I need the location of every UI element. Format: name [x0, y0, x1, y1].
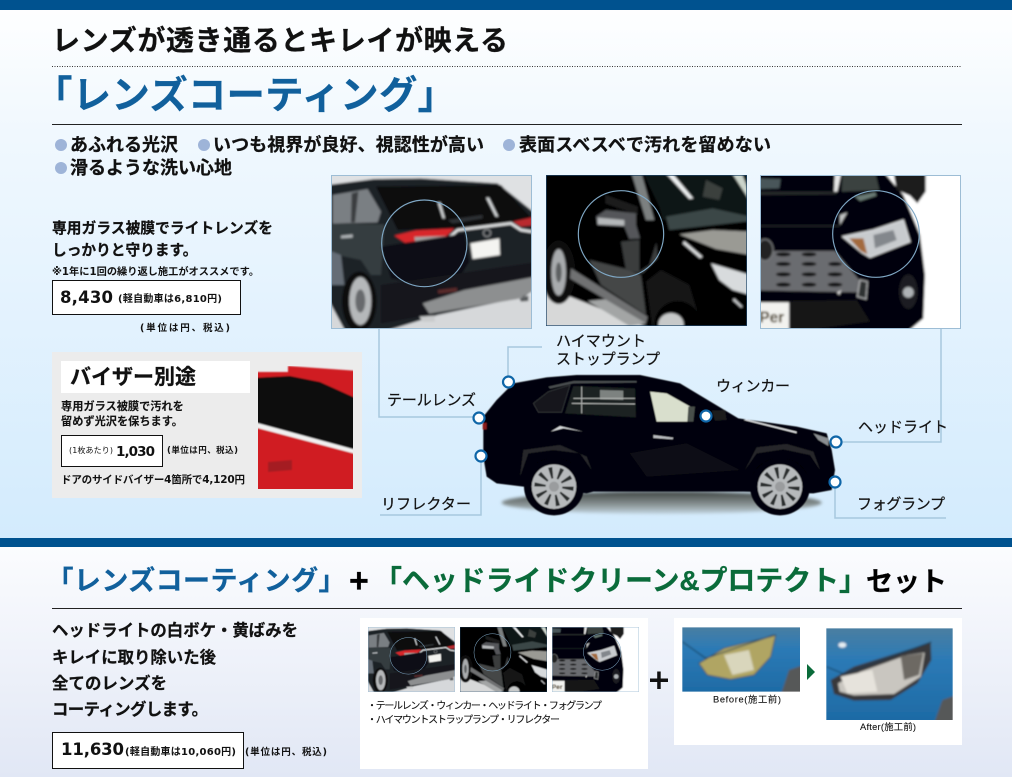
price box: set: 11,630: [61, 740, 124, 759]
hotspot markers: [474, 376, 842, 488]
price box: set: (軽自動車は10,060円): [125, 745, 236, 758]
lens list: [367, 699, 602, 726]
set description: コーティングします。: [52, 700, 208, 719]
car part labels: テールレンズ: [387, 392, 476, 409]
top blue bar: [0, 0, 1012, 10]
feature bullets: 表面スベスベで汚れを留めない: [519, 135, 771, 155]
lens list: ・テールレンズ・ウィンカー・ヘッドライト・フォグランプ: [367, 699, 602, 712]
car part labels: ハイマウント: [556, 333, 646, 350]
panel: visor: [52, 352, 362, 498]
set description: ヘッドライトの白ボケ・黄ばみを: [52, 622, 298, 640]
price box: set: [52, 732, 244, 768]
photo: winker: [542, 172, 750, 349]
feature bullets: いつも視界が良好、視認性が高い: [213, 134, 484, 155]
visor heading: バイザー別途: [70, 366, 196, 389]
visor heading: [61, 361, 250, 393]
before caption: Before(施工前): [713, 694, 781, 705]
car part labels: [381, 333, 948, 513]
visor text: 留めず光沢を保ちます。: [61, 414, 183, 428]
set description: キレイに取り除いた後: [52, 648, 217, 667]
description text: 専用ガラス被膜でライトレンズを: [52, 219, 273, 237]
description text: ※1年に1回の繰り返し施工がオススメです。: [52, 265, 259, 278]
description text: しっかりと守ります。: [52, 241, 197, 259]
unit note: (単位は円、税込): [140, 322, 230, 334]
visor note: ドアのサイドバイザー4箇所で4,120円: [61, 473, 245, 486]
photo: headlight: [757, 172, 964, 332]
visor text: 専用ガラス被膜で汚れを: [61, 399, 184, 413]
before photo: [682, 627, 800, 692]
thumbnails: [367, 626, 640, 702]
section divider bar: [0, 538, 1012, 547]
panel: lens thumbnails: [360, 618, 648, 769]
photo: tail lens: [328, 172, 535, 332]
set heading: 「レンズコーティング」: [46, 565, 346, 596]
after photo: [826, 628, 953, 720]
visor price box: [62, 436, 162, 466]
car part labels: ウィンカー: [716, 378, 790, 395]
car part labels: リフレクター: [381, 496, 471, 513]
visor price box: (1枚あたり): [69, 445, 113, 455]
car illustration: [483, 375, 835, 515]
set unit note: (単位は円、税込): [245, 746, 327, 758]
title: レンズが透き通るとキレイが映える: [52, 24, 508, 56]
feature bullets: 滑るような洗い心地: [70, 157, 232, 178]
set heading: [46, 562, 947, 600]
set heading: 「ヘッドライドクリーン&プロテクト」: [374, 565, 867, 596]
set heading: +: [349, 562, 369, 600]
plus sign: [650, 672, 668, 689]
panel: headlight before and after: [674, 618, 962, 745]
arrow: [807, 664, 815, 680]
main heading: 「レンズコーティング」: [34, 74, 456, 118]
price box: lens coating: (軽自動車は6,810円): [118, 292, 222, 305]
visor text: [61, 399, 184, 428]
after caption: After(施工前): [860, 721, 916, 732]
visor unit note: (単位は円、税込): [167, 445, 238, 456]
price box: lens coating: 8,430: [60, 288, 113, 307]
visor price box: 1,030: [116, 444, 155, 460]
visor photo: [258, 366, 353, 489]
car part labels: ストップランプ: [556, 351, 660, 368]
car part labels: ヘッドライト: [858, 419, 948, 436]
set description: 全てのレンズを: [52, 674, 167, 693]
set heading: セット: [866, 567, 947, 597]
feature bullets: [55, 134, 771, 178]
price box: lens coating: [52, 280, 240, 314]
set description: [52, 622, 298, 719]
feature bullets: あふれる光沢: [70, 135, 178, 155]
leader lines: [379, 329, 946, 518]
description text: [52, 219, 273, 278]
car part labels: フォグランプ: [857, 496, 945, 513]
lens list: ・ハイマウントストラップランプ・リフレクター: [367, 714, 560, 726]
